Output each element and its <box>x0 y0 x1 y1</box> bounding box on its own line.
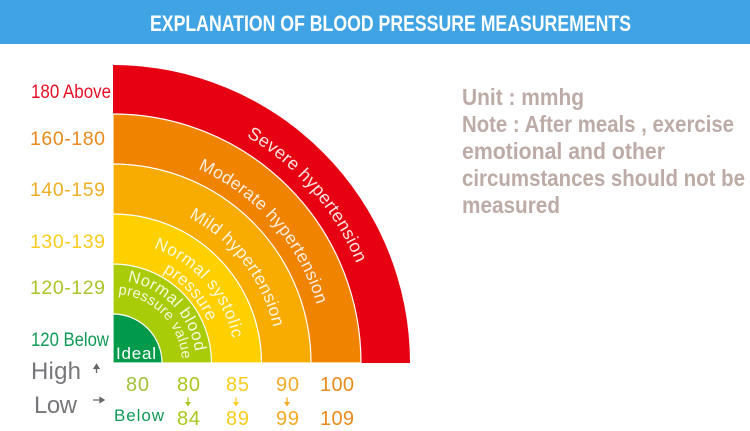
label 120 below: 120 Below <box>31 330 109 351</box>
note text block <box>462 84 745 218</box>
band label: normal blood: Normal blood <box>128 270 207 350</box>
column 90-99: 99 <box>276 408 299 430</box>
column 80: 80 <box>126 374 149 396</box>
band: moderate hypertension <box>113 114 361 363</box>
note text block: emotional and other <box>462 138 665 164</box>
label 180 above: 180 Above <box>31 82 111 103</box>
column 100-109: 109 <box>320 408 354 430</box>
unit line: Unit : mmhg <box>462 84 584 110</box>
label 140-159: 140-159 <box>30 179 105 201</box>
icon: right arrow <box>93 398 104 402</box>
column 85-89: 85 <box>226 374 249 396</box>
legend: low: Low <box>34 392 78 419</box>
legend: low <box>34 392 104 419</box>
band label: ideal: Ideal <box>116 344 156 363</box>
column 80-84 <box>177 374 200 430</box>
band label: normal systolic: Normal systolic <box>155 238 242 338</box>
column 90-99: 90 <box>276 374 299 396</box>
band label: pressure: pressure <box>162 264 214 320</box>
label 120-129: 120-129 <box>30 277 105 299</box>
band: mild hypertension <box>113 164 311 363</box>
column 85-89: 89 <box>226 408 249 430</box>
column 100-109 <box>320 374 354 430</box>
band label: severe: Severe hypertension <box>248 128 364 262</box>
icon: up arrow <box>94 364 99 373</box>
legend: high: High <box>31 358 81 385</box>
band label: mild: Mild hypertension <box>190 208 282 326</box>
column 85-89 <box>226 374 249 430</box>
label 160-180: 160-180 <box>30 128 105 150</box>
band: normal systolic pressure <box>113 214 262 363</box>
header banner <box>0 0 750 44</box>
column 80-84: 80 <box>177 374 200 396</box>
title: EXPLANATION OF BLOOD PRESSURE MEASUREMENTS <box>150 11 631 36</box>
band label: moderate: Moderate hypertension <box>199 158 325 304</box>
band: ideal <box>113 314 162 363</box>
column 90-99 <box>276 374 299 430</box>
column 100-109: 100 <box>320 374 354 396</box>
note text block: measured <box>462 192 560 218</box>
systolic scale labels <box>30 82 111 351</box>
band: normal blood pressure value <box>113 264 212 363</box>
diastolic scale <box>114 374 354 430</box>
band label: pressure value: pressure value <box>118 286 190 358</box>
label 130-139: 130-139 <box>30 231 105 253</box>
label below: Below <box>114 406 165 425</box>
band: severe hypertension <box>113 65 410 363</box>
quarter-circle chart <box>113 65 410 363</box>
column 80-84: 84 <box>177 408 200 430</box>
